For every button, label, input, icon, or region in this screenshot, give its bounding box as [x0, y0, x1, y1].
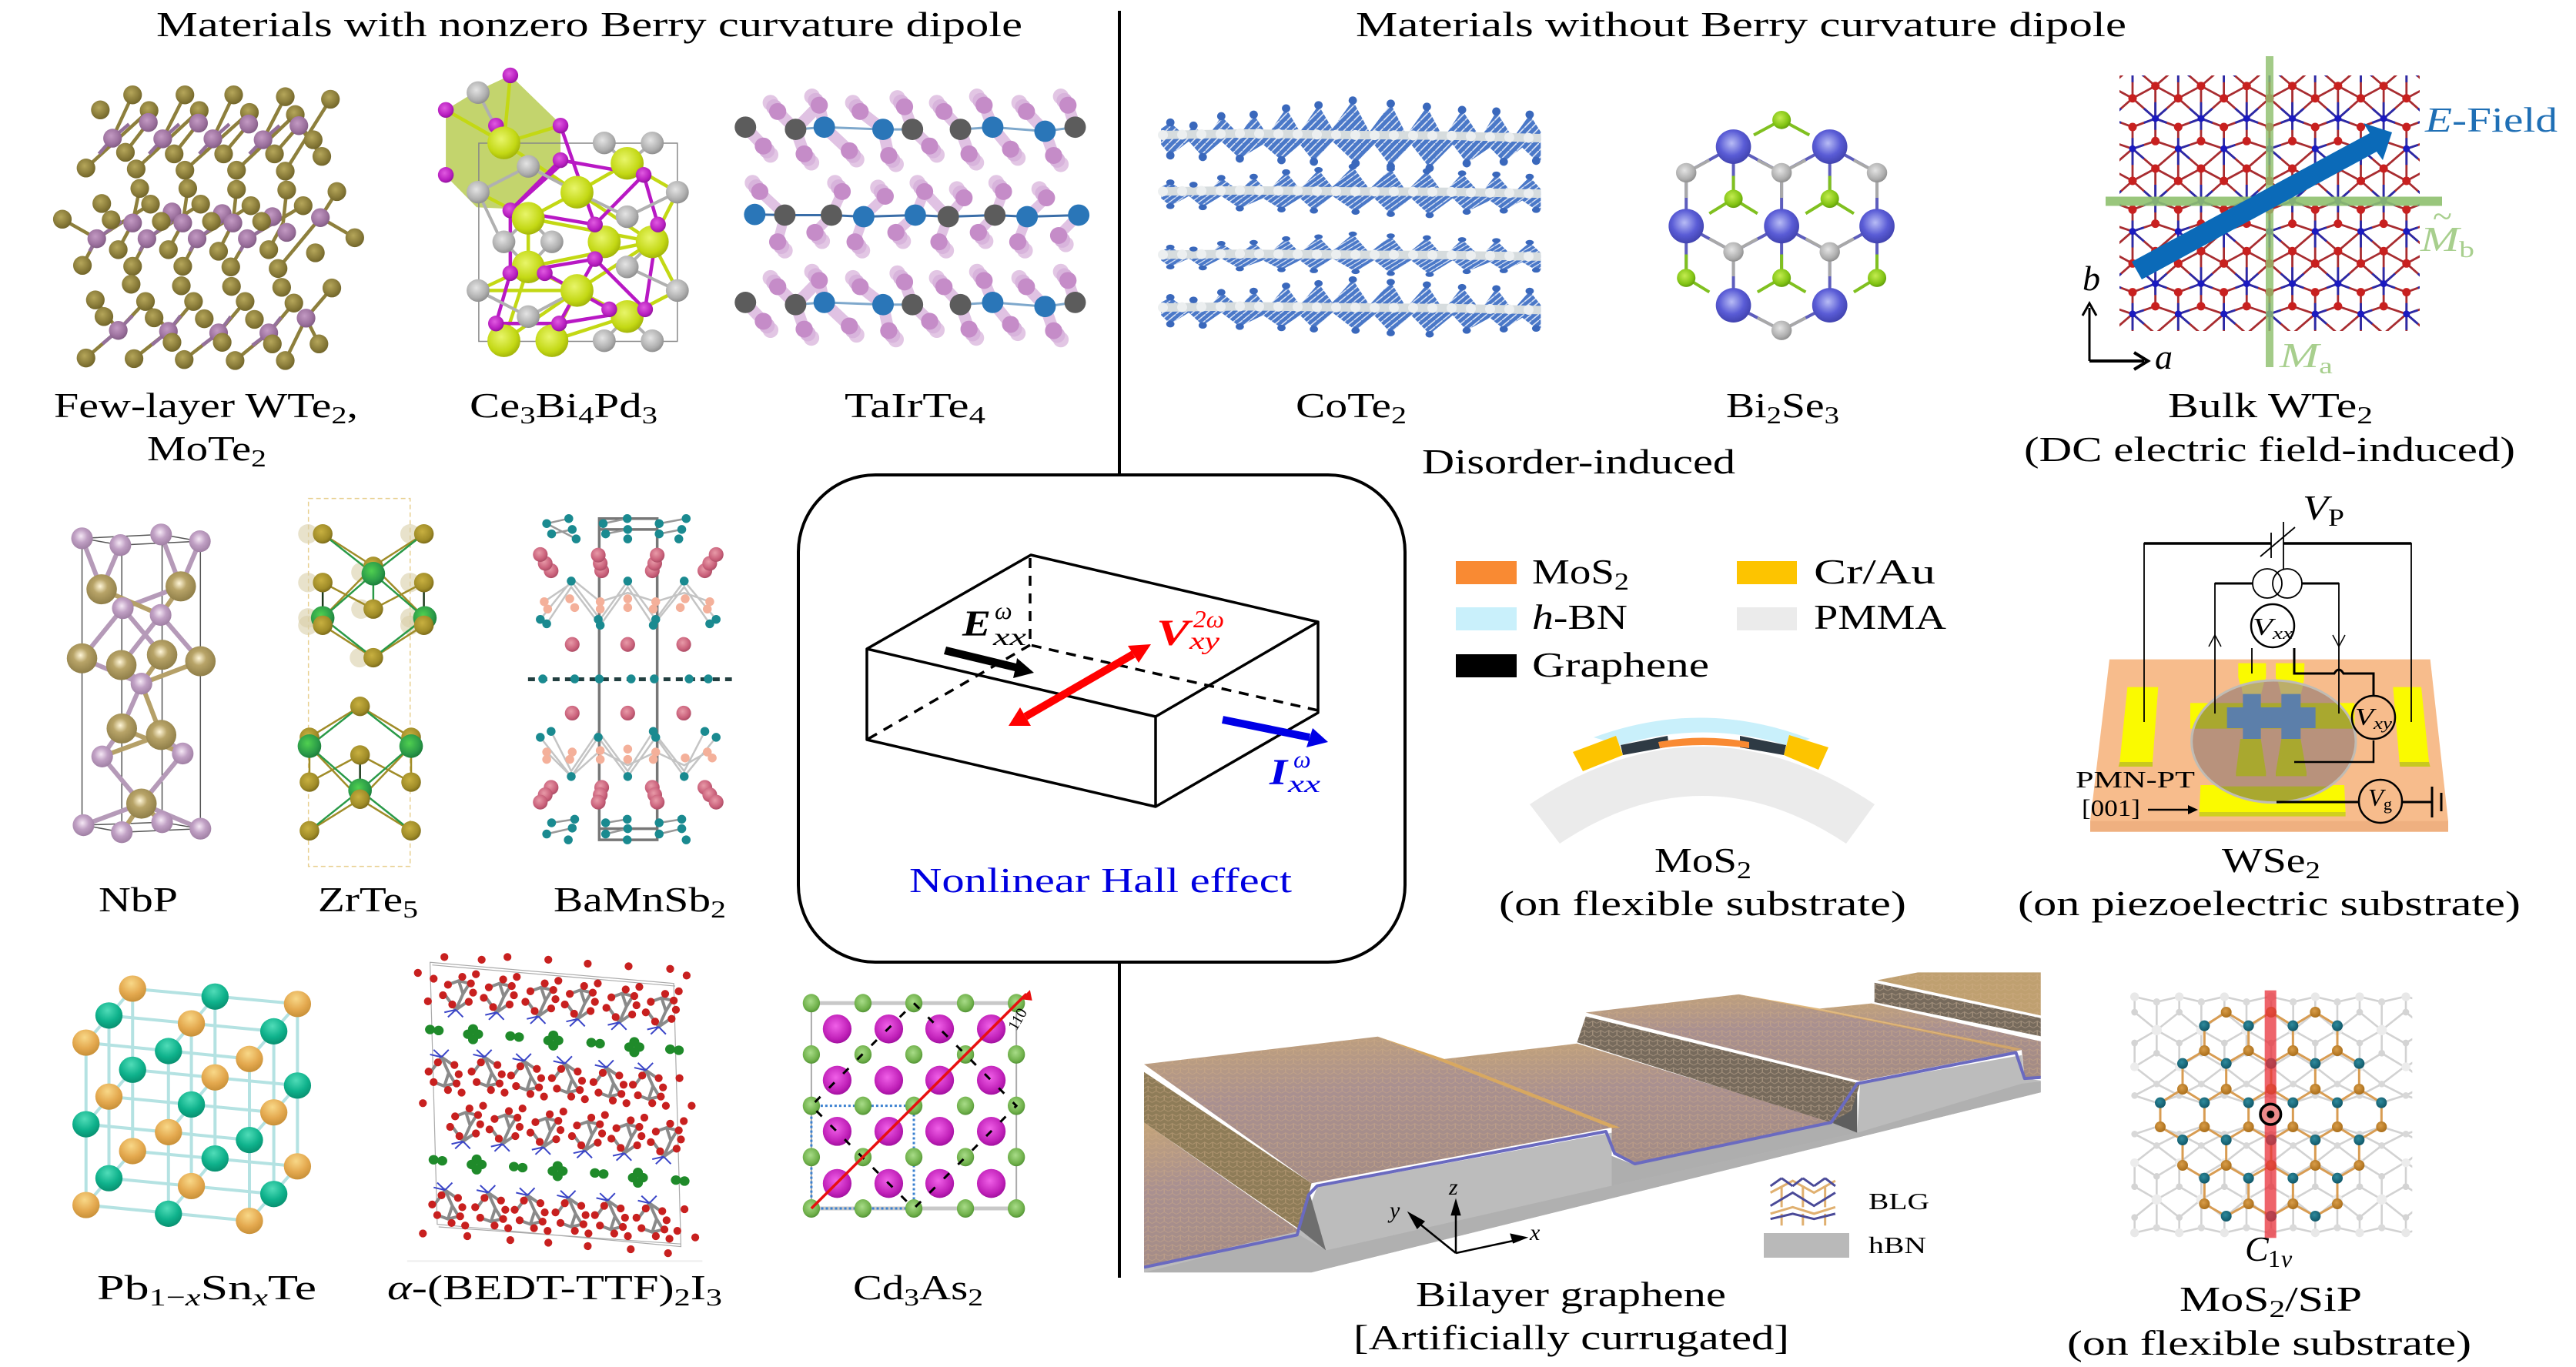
label: Bi2Se3: 3	[1825, 401, 1839, 429]
label: V_g: g	[2384, 794, 2392, 814]
label: TaIrTe4: 4	[969, 401, 985, 429]
label: Ce3Bi4Pd3: 3	[520, 401, 536, 429]
label: E xx omega: E	[962, 603, 991, 644]
divider: upper vertical line	[1118, 11, 1121, 475]
label: V_g: V	[2368, 784, 2384, 811]
crystal: BaMnSb2	[528, 514, 732, 844]
label: MoTe2: MoTe	[147, 429, 231, 468]
label: C1v: C	[2245, 1229, 2270, 1268]
label: V_xx: xx	[2272, 623, 2293, 643]
label: WSe2: 2	[2306, 856, 2320, 884]
label: BaMnSb2: BaMnSb	[554, 880, 680, 919]
label: MoTe2: 2	[251, 444, 266, 472]
label: alpha-(BEDT-TTF)2I3: I	[691, 1268, 706, 1307]
label: 110 direction: 110	[1005, 1005, 1031, 1033]
label: Pb1-xSnxTe: Pb	[97, 1268, 135, 1307]
crystal: Pb1-xSnxTe	[72, 975, 311, 1234]
arrow: a axis	[2089, 353, 2148, 369]
legend: layer materials: h-BN	[1532, 597, 1628, 637]
label: ZrTe5: 5	[403, 895, 418, 923]
label: MoS2: 2	[1737, 856, 1751, 884]
label: V_xy: V	[2355, 703, 2370, 730]
label: Ce3Bi4Pd3: Ce	[470, 386, 509, 425]
label: E xx omega	[962, 597, 1026, 650]
crystal: MoS2/SiP lattice	[2130, 990, 2413, 1238]
legend: layer materials: Graphene	[1532, 645, 1709, 684]
label: Few-layer WTe2: 2	[331, 401, 347, 429]
label: Pb1-xSnxTe: Te	[268, 1268, 316, 1307]
label: V_xy: xy	[2373, 714, 2392, 733]
label: V xy 2omega: 2ω	[1193, 605, 1224, 633]
label: CoTe2: CoTe	[1296, 386, 1372, 425]
label: alpha-(BEDT-TTF)2I3: α-(BEDT-TTF)	[387, 1268, 611, 1307]
legend: layer materials: PMMA	[1814, 597, 1946, 637]
label: alpha-(BEDT-TTF)2I3: 2	[674, 1283, 691, 1311]
label: V xy 2omega	[1156, 605, 1224, 654]
label: Pb1-xSnxTe: Sn	[201, 1268, 253, 1307]
label: C1v: 1	[2268, 1245, 2280, 1272]
label: TaIrTe4: TaIrTe	[845, 386, 938, 425]
label: WSe2: WSe	[2222, 841, 2290, 880]
arrow: E-field	[2132, 123, 2392, 279]
label: E xx omega: ω	[995, 597, 1012, 624]
label: MoS2: MoS	[1654, 841, 1723, 880]
label: [001]: [001]	[2082, 794, 2140, 821]
illustration: corrugated bilayer graphene on hBN	[1144, 972, 2045, 1272]
label: on piezoelectric substrate: (on piezoelectric substrate)	[2018, 884, 2521, 923]
label: mirror Ma: M	[2280, 336, 2309, 375]
label: Bi2Se3: Se	[1781, 386, 1825, 425]
arrow: b axis	[2083, 303, 2096, 361]
label: mirror Ma: a	[2319, 353, 2333, 379]
label: DC electric field-induced: (DC electric field-induced)	[2024, 429, 2515, 469]
label: BaMnSb2: 2	[711, 895, 726, 923]
diagram: sample block	[867, 555, 1318, 807]
label: NbP: NbP	[99, 880, 178, 919]
label: MoS2/SiP: MoS	[2180, 1279, 2248, 1319]
label: Bulk WTe2: Bulk WTe	[2168, 386, 2313, 425]
label: MoS2/SiP: /SiP	[2285, 1279, 2362, 1319]
crystal: CoTe2	[1161, 96, 1541, 338]
label: Ce3Bi4Pd3: Bi	[536, 386, 578, 425]
label: on flexible substrate, SiP: (on flexible substrate)	[2067, 1323, 2471, 1362]
label: Cd3As2: Cd	[853, 1268, 895, 1307]
legend: layer materials: 2	[1614, 567, 1629, 595]
legend: hBN swatch	[1764, 1233, 1849, 1258]
label: C1v: v	[2281, 1245, 2293, 1272]
label: on flexible substrate: (on flexible substrate)	[1499, 884, 1906, 923]
label: Pb1-xSnxTe: 1− x	[149, 1283, 196, 1311]
legend: layer materials: MoS	[1532, 552, 1601, 591]
label: mirror Mb: b	[2459, 237, 2474, 262]
heading: materials with nonzero Berry curvature dipole: Materials with nonzero Berry curvature dipole	[156, 5, 1022, 44]
diagram: WSe2 device on piezoelectric substrate	[2090, 522, 2448, 832]
label: Bi2Se3: 2	[1767, 401, 1781, 429]
label: I xx omega: xx	[1287, 770, 1320, 797]
label: V xy 2omega: xy	[1189, 627, 1220, 654]
label: mirror Mb: M	[2420, 219, 2450, 259]
label: hBN: hBN	[1868, 1232, 1926, 1258]
arrow: electric field	[944, 647, 1034, 678]
label: V_P: V	[2303, 488, 2324, 527]
divider: lower vertical line	[1118, 962, 1121, 1278]
label: y axis: y	[1387, 1198, 1400, 1223]
label: BLG: BLG	[1868, 1188, 1929, 1215]
label: Pb1-xSnxTe: x	[252, 1283, 268, 1311]
legend: layer materials	[1456, 552, 1946, 684]
label: V_xx: V	[2253, 613, 2268, 640]
crystal: few-layer WTe2	[53, 85, 364, 370]
label: C1v	[2245, 1229, 2293, 1272]
label: Few-layer WTe2: ,	[347, 386, 358, 425]
label: I xx omega	[1269, 745, 1320, 797]
heading: Disorder-induced: Disorder-induced	[1422, 442, 1735, 481]
label: Bi2Se3: Bi	[1726, 386, 1759, 425]
label: PMN-PT: PMN-PT	[2076, 766, 2195, 793]
label: I xx omega: ω	[1293, 745, 1311, 773]
label: Cd3As2: 3	[904, 1283, 919, 1311]
label: alpha-(BEDT-TTF)2I3: 3	[706, 1283, 722, 1311]
label: V_P: P	[2328, 503, 2344, 531]
icon: rotation axis target	[2260, 1104, 2281, 1125]
axes: x y z	[1410, 1202, 1525, 1253]
label: CoTe2: 2	[1391, 401, 1407, 429]
crystal: Bi2Se3	[1668, 111, 1895, 340]
crystal: Cd3As2	[803, 990, 1032, 1218]
label: Ce3Bi4Pd3: 3	[642, 401, 657, 429]
label: z axis: z	[1448, 1175, 1458, 1200]
crystal: TaIrTe4	[734, 89, 1089, 347]
label: Ce3Bi4Pd3: Pd	[594, 386, 642, 425]
label: E-Field: E-Field	[2424, 100, 2558, 139]
arrow: Hall voltage	[1009, 644, 1151, 726]
label: Few-layer WTe2: Few-layer WTe	[54, 386, 274, 425]
label: Artificially currugated: [Artificially currugated]	[1353, 1318, 1789, 1357]
panel: nonlinear Hall effect central box	[798, 475, 1405, 962]
label: tilde: ~	[2433, 196, 2452, 236]
crystal: ZrTe5	[298, 499, 437, 867]
label: E xx omega: xx	[992, 623, 1026, 650]
heading: materials without Berry curvature dipole: Materials without Berry curvature dipole	[1356, 5, 2126, 44]
crystal: alpha-(BEDT-TTF)2I3	[407, 953, 702, 1261]
label: MoS2/SiP: 2	[2269, 1295, 2285, 1322]
label: x axis: x	[1529, 1220, 1541, 1245]
label: Bulk WTe2: 2	[2357, 401, 2373, 429]
legend: layer materials: Cr/Au	[1814, 552, 1935, 591]
label: V xy 2omega: V	[1156, 613, 1193, 653]
panel: bulk WTe2 lattice with mirror lines	[2082, 56, 2442, 371]
label: Ce3Bi4Pd3: 4	[578, 401, 594, 429]
arrow: current	[1223, 720, 1328, 747]
diagram: MoS2 device on flexible substrate	[1530, 717, 1875, 844]
label: a axis: a	[2155, 337, 2173, 376]
label: Cd3As2: 2	[968, 1283, 983, 1311]
crystal: NbP	[67, 523, 216, 843]
label: Cd3As2: As	[919, 1268, 968, 1307]
label: I xx omega: I	[1269, 752, 1290, 793]
label: b axis: b	[2083, 259, 2100, 298]
label: Bilayer graphene: Bilayer graphene	[1416, 1275, 1726, 1314]
label: Nonlinear Hall effect: Nonlinear Hall effect	[909, 861, 1292, 900]
crystal: Ce3Bi4Pd3	[438, 68, 689, 357]
legend: BLG swatch	[1771, 1178, 1835, 1225]
label: ZrTe5: ZrTe	[318, 880, 386, 919]
